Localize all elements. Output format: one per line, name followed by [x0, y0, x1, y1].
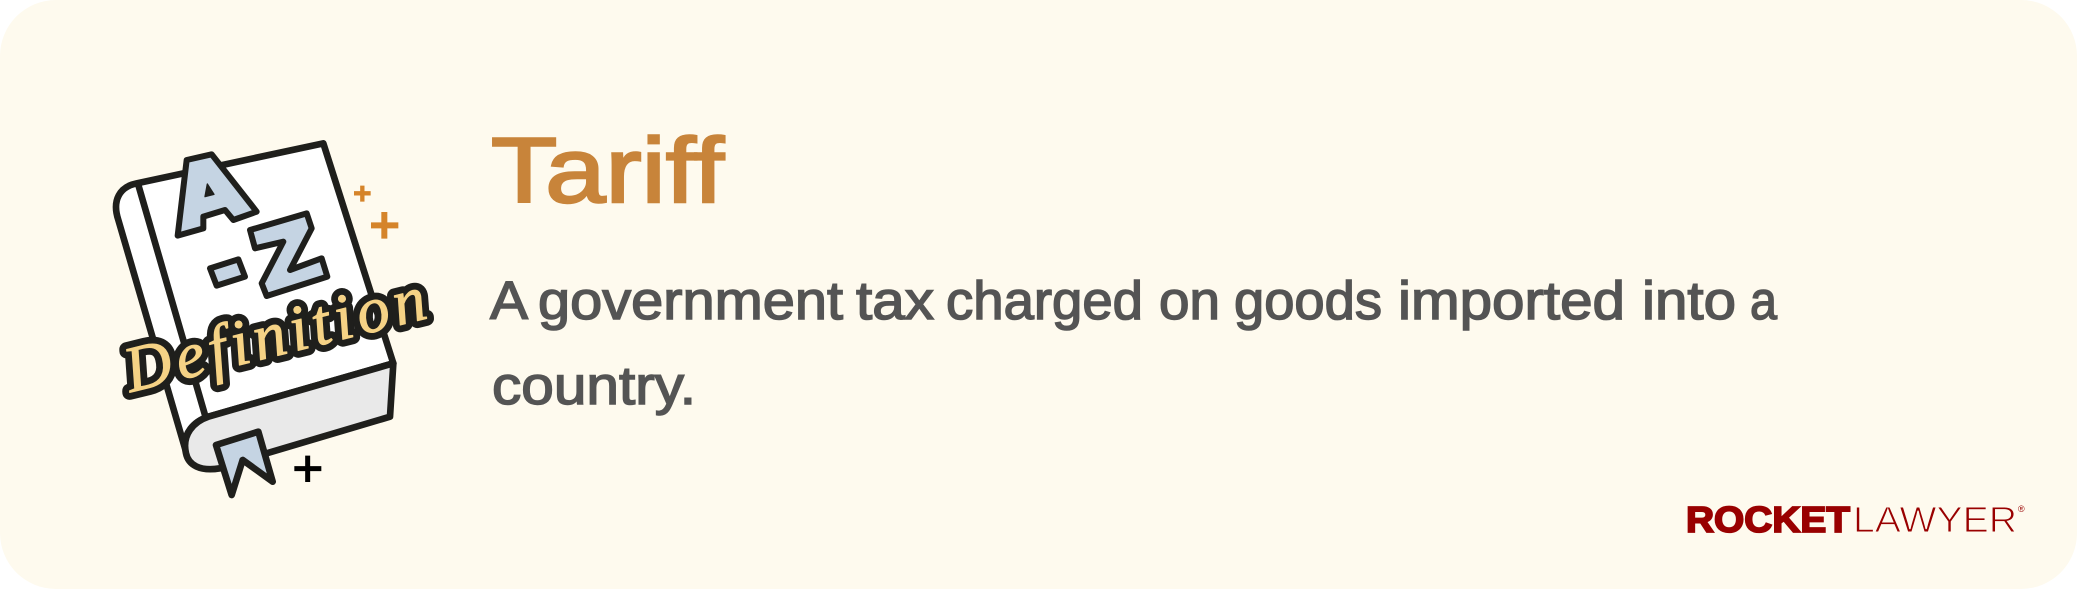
definition line 1: into: [1642, 271, 1736, 331]
heading: Tariff: Tariff: [491, 120, 725, 222]
definition line 1: a: [1750, 271, 1778, 331]
letter A counter: [205, 184, 214, 197]
script label: Definition: Definition: [116, 262, 433, 407]
icon: small orange plus: [354, 186, 371, 202]
definition text block: [490, 271, 1778, 416]
definition line 1: charged: [946, 271, 1143, 331]
definition line 1: goods: [1234, 271, 1382, 331]
icon: black plus: [294, 456, 321, 482]
script label: Definition: Definition: [116, 262, 433, 407]
definition line 1: [490, 271, 1778, 331]
definition line 1: tax: [856, 271, 934, 331]
book pages block: [185, 363, 393, 469]
logo: Rocket Lawyer: [1686, 499, 2025, 540]
logo word: ROCKET: ROCKET: [1686, 499, 1850, 540]
letter shape Z: [250, 213, 327, 296]
book spine line: [138, 185, 205, 415]
logo registered mark: ®: [2018, 504, 2025, 514]
icon: dictionary book with A-Z and Definition lettering: [116, 143, 433, 495]
definition line 1: imported: [1398, 271, 1625, 331]
definition line 1: government: [538, 271, 843, 331]
definition line 1: on: [1159, 271, 1220, 331]
letter shape dash: [210, 259, 245, 286]
definition line 1: A: [490, 271, 528, 331]
definition line 2: country.: [492, 356, 696, 416]
book cover: [116, 143, 393, 448]
letter shape A: [178, 154, 257, 236]
icon: bookmark ribbon: [216, 432, 273, 495]
logo word: LAWYER: LAWYER: [1853, 499, 2017, 540]
icon: large orange plus: [371, 212, 398, 239]
